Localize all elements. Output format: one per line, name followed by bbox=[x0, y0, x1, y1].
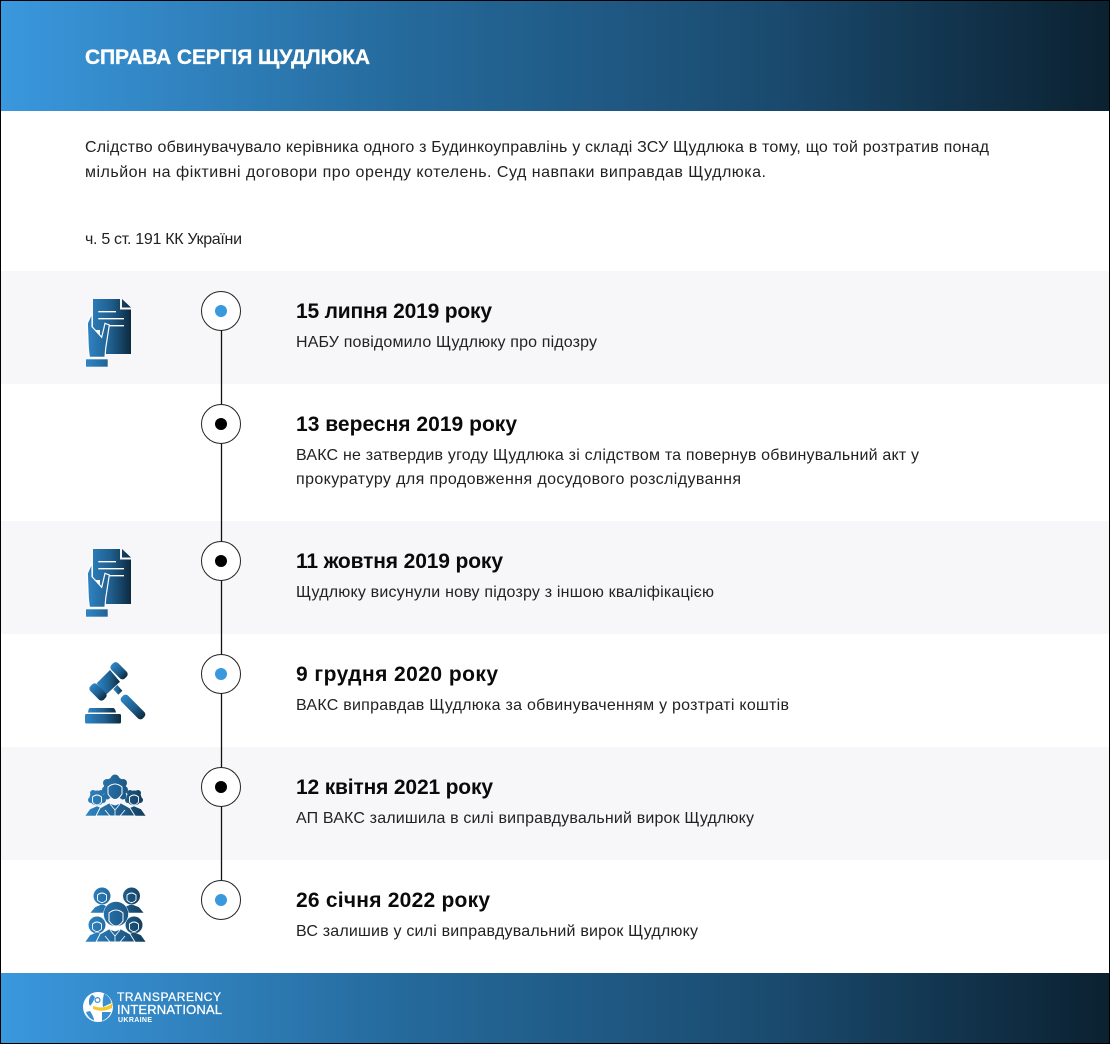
icon: group of three judges bbox=[85, 774, 146, 816]
description: ВС залишив у силі виправдувальний вирок Щудлюку bbox=[296, 923, 698, 940]
logo: Transparency International Ukraine bbox=[83, 990, 222, 1024]
date: 26 січня 2022 року bbox=[296, 889, 490, 912]
icon: document in hand bbox=[86, 549, 131, 617]
timeline event: 12 April 2021 bbox=[85, 768, 754, 827]
date: 11 жовтня 2019 року bbox=[296, 550, 503, 573]
icon: group of five judges bbox=[85, 888, 146, 942]
timeline event: 26 January 2022 bbox=[85, 880, 698, 942]
description bbox=[296, 447, 919, 488]
header band bbox=[0, 0, 1110, 111]
icon: document in hand bbox=[86, 299, 131, 367]
date: 13 вересня 2019 року bbox=[296, 413, 517, 436]
description: Щудлюку висунули нову підозру з іншою кваліфікацією bbox=[296, 584, 714, 601]
date: 12 квітня 2021 року bbox=[296, 776, 493, 799]
logo: Transparency International Ukraine: UKRAINE bbox=[118, 1017, 152, 1024]
timeline event: 9 December 2020 bbox=[85, 654, 789, 724]
timeline marker bbox=[202, 292, 240, 330]
timeline event: 11 October 2019 bbox=[86, 542, 714, 617]
description: ВАКС не затвердив угоду Щудлюка зі слідством та повернув обвинувальний акт у bbox=[296, 447, 919, 464]
title: СПРАВА СЕРГІЯ ЩУДЛЮКА bbox=[85, 46, 370, 69]
timeline event: 15 July 2019 bbox=[86, 292, 597, 367]
timeline line bbox=[220, 311, 222, 900]
logo: Transparency International Ukraine: INTERNATIONAL bbox=[117, 1002, 222, 1017]
timeline marker bbox=[202, 880, 240, 920]
footer band bbox=[0, 973, 1110, 1044]
description: прокуратуру для продовження досудового розслідування bbox=[296, 471, 741, 488]
description: АП ВАКС залишила в силі виправдувальний вирок Щудлюку bbox=[296, 810, 754, 827]
timeline marker bbox=[202, 768, 240, 806]
intro text: мільйон на фіктивні договори про оренду котелень. Суд навпаки виправдав Щудлюка. bbox=[85, 164, 766, 181]
description: ВАКС виправдав Щудлюка за обвинуваченням у розтраті коштів bbox=[296, 697, 789, 714]
intro text bbox=[85, 139, 990, 181]
timeline event: 13 September 2019 bbox=[202, 404, 919, 488]
timeline marker bbox=[202, 654, 240, 694]
intro text: Слідство обвинувачувало керівника одного з Будинкоуправлінь у складі ЗСУ Щудлюка в тому, що той розтратив понад bbox=[85, 139, 990, 156]
timeline marker bbox=[202, 404, 240, 444]
description: НАБУ повідомило Щудлюку про підозру bbox=[296, 334, 597, 351]
icon: gavel bbox=[85, 661, 147, 724]
legal article: ч. 5 ст. 191 КК України bbox=[85, 231, 242, 248]
logo globe bbox=[83, 992, 113, 1022]
row backgrounds bbox=[0, 271, 1110, 860]
date: 9 грудня 2020 року bbox=[296, 663, 498, 686]
logo: Transparency International Ukraine: TRANSPARENCY bbox=[117, 990, 221, 1004]
timeline marker bbox=[202, 542, 240, 580]
date: 15 липня 2019 року bbox=[296, 300, 492, 323]
